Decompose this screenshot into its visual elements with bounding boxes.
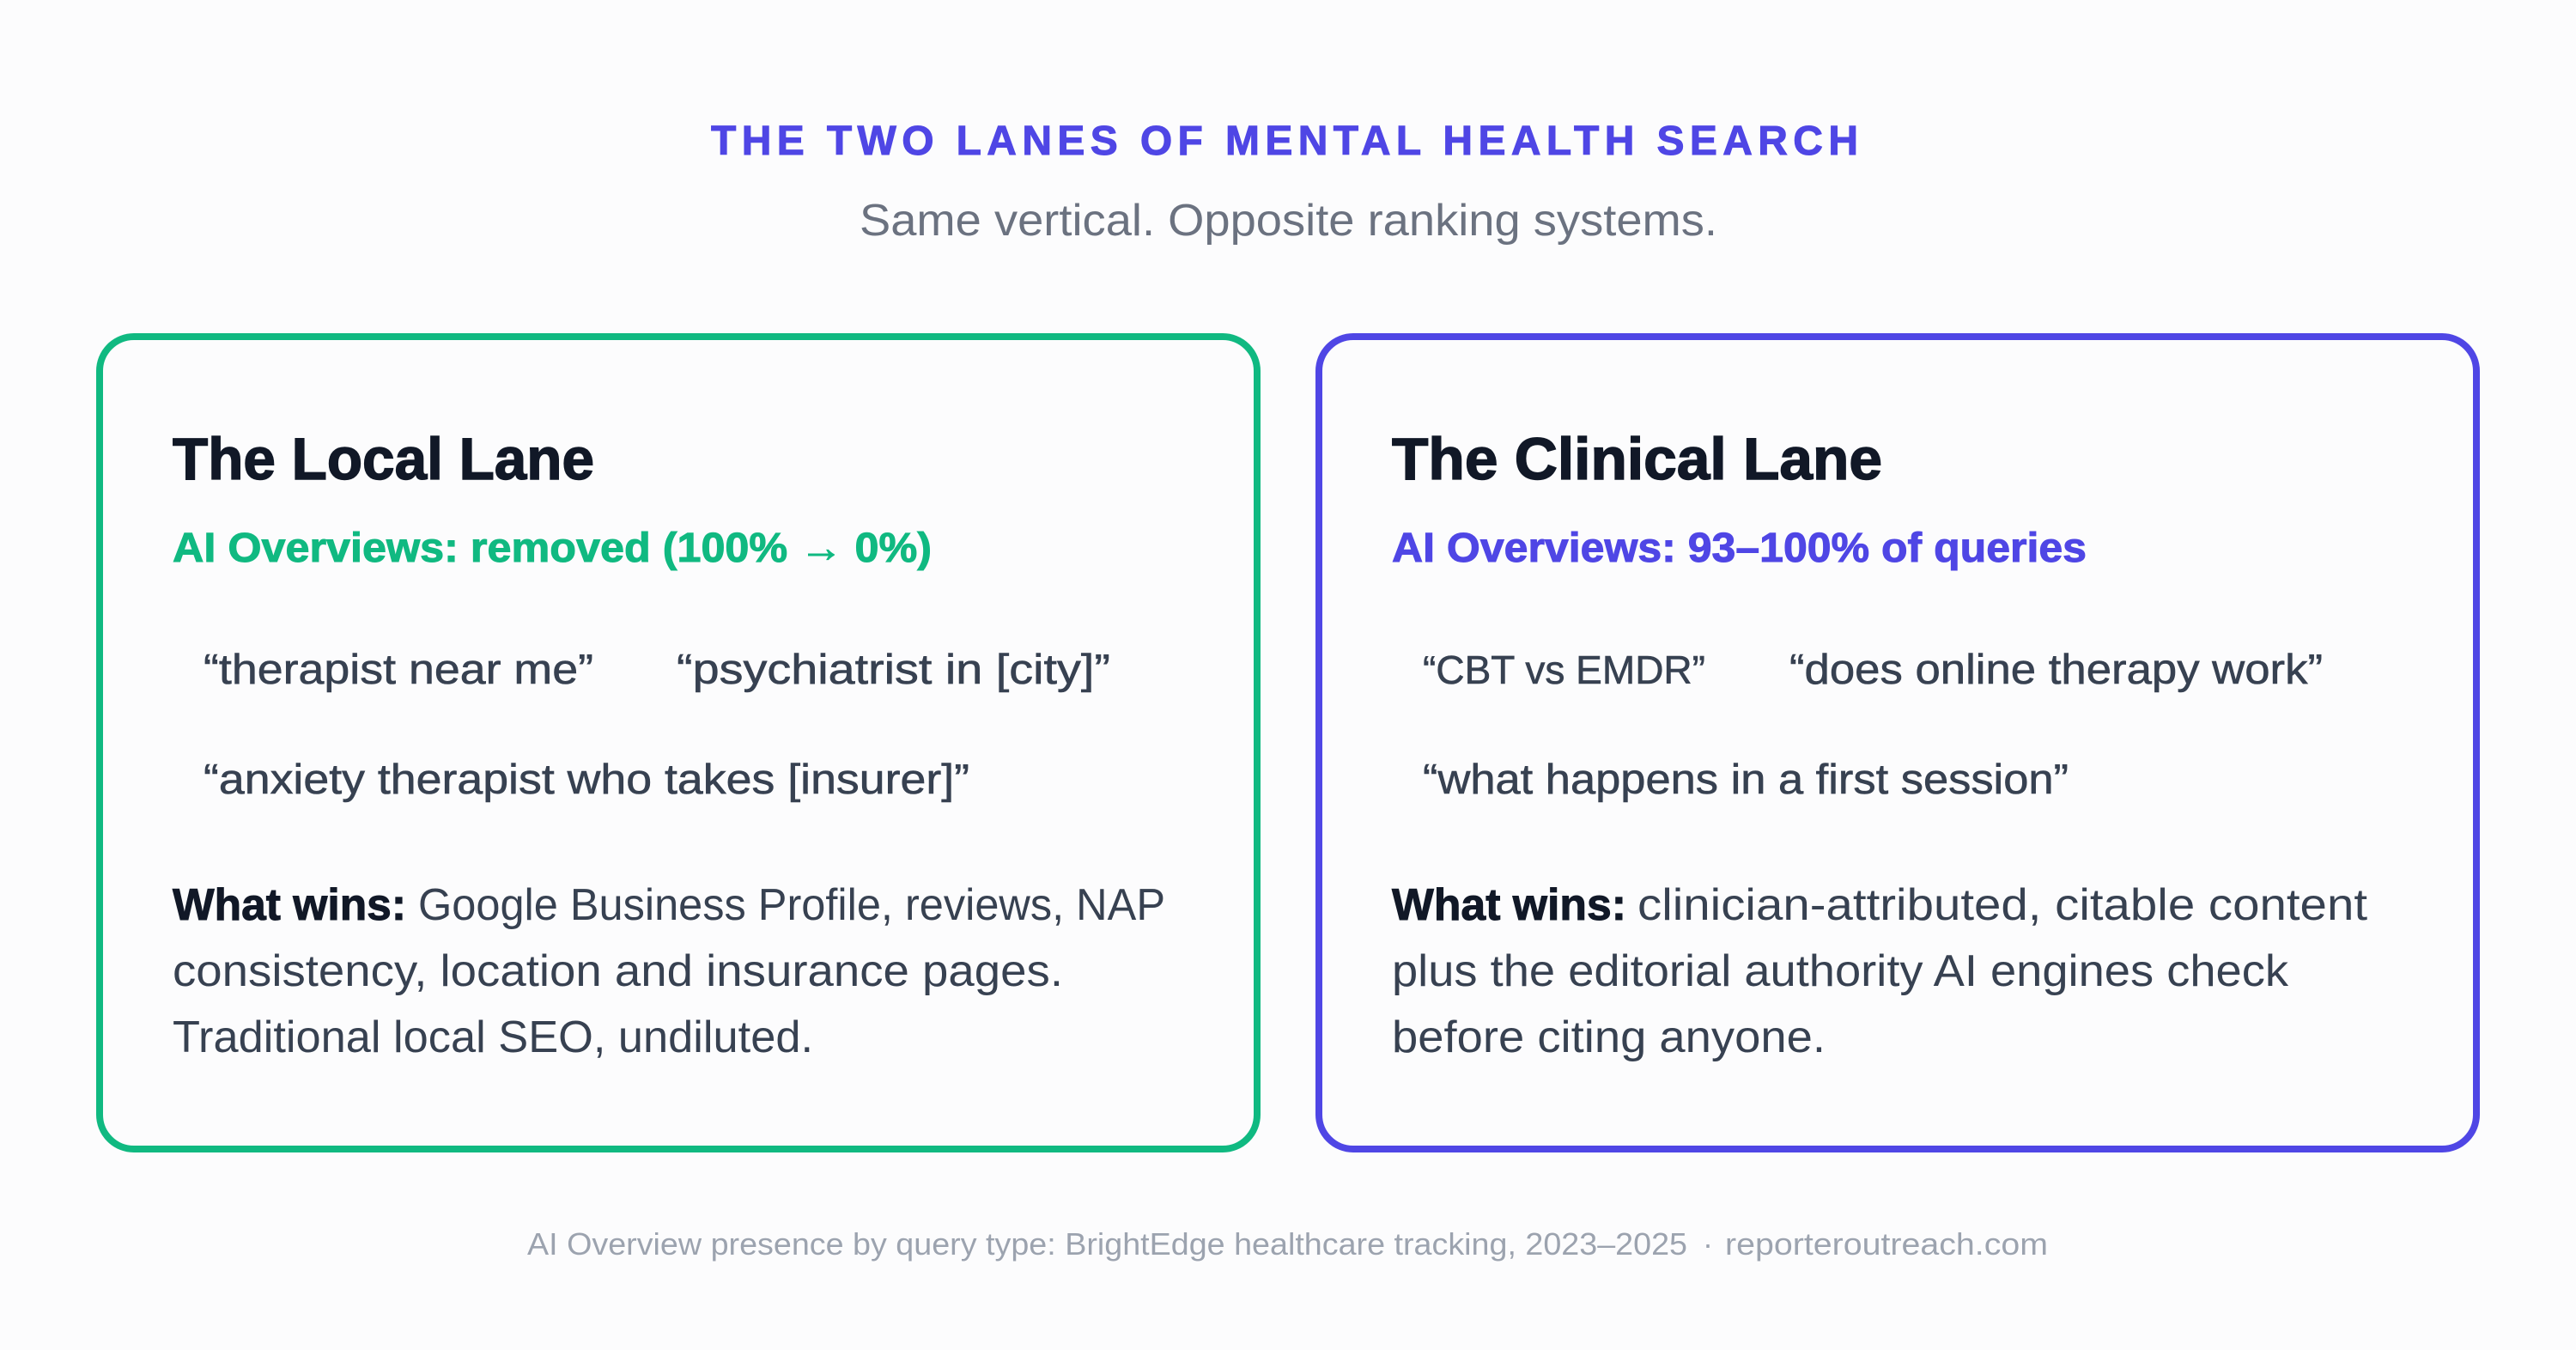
query tag: “therapist near me” bbox=[204, 647, 593, 693]
query tag: “anxiety therapist who takes [insurer]” bbox=[204, 757, 969, 803]
text block: what wins, local: consistency, location and insurance pages. bbox=[173, 946, 1063, 996]
text block: what wins, local: Traditional local SEO, undiluted. bbox=[173, 1012, 813, 1062]
title: THE TWO LANES OF MENTAL HEALTH SEARCH bbox=[711, 119, 1858, 164]
header bbox=[711, 119, 1858, 246]
query tag: “does online therapy work” bbox=[1789, 647, 2323, 693]
footer source line: reporteroutreach.com bbox=[1725, 1226, 2048, 1262]
panel heading: clinical: The Clinical Lane bbox=[1392, 426, 1882, 492]
panel: the local lane bbox=[100, 337, 1257, 1149]
text block: what wins, local: Google Business Profile, reviews, NAP bbox=[418, 880, 1165, 930]
text block: what wins, clinical: What wins: bbox=[1392, 880, 1626, 930]
subtitle: Same vertical. Opposite ranking systems. bbox=[860, 196, 1717, 246]
text block: what wins, local: What wins: bbox=[173, 880, 406, 930]
text block: what wins, clinical: before citing anyone. bbox=[1392, 1012, 1826, 1062]
footer source line: · bbox=[1703, 1226, 1713, 1262]
panel subheading: local: AI Overviews: removed (100% → 0%) bbox=[173, 526, 932, 571]
query tag: “psychiatrist in [city]” bbox=[677, 647, 1110, 693]
query examples: clinical bbox=[1423, 647, 2323, 803]
query tag: “what happens in a first session” bbox=[1423, 757, 2069, 803]
text block: what wins, clinical bbox=[1392, 880, 2368, 1062]
query examples: local bbox=[204, 647, 1110, 803]
panel heading: local: The Local Lane bbox=[173, 426, 594, 492]
panel subheading: clinical: AI Overviews: 93–100% of queries bbox=[1392, 526, 2087, 571]
panel: the clinical lane bbox=[1319, 337, 2476, 1149]
text block: what wins, clinical: clinician-attributed, citable content bbox=[1637, 880, 2368, 930]
text block: what wins, clinical: plus the editorial authority AI engines check bbox=[1392, 946, 2289, 996]
footer source line: AI Overview presence by query type: BrightEdge healthcare tracking, 2023–2025 bbox=[527, 1226, 1687, 1262]
text block: what wins, local bbox=[173, 880, 1165, 1062]
query tag: “CBT vs EMDR” bbox=[1423, 648, 1705, 692]
